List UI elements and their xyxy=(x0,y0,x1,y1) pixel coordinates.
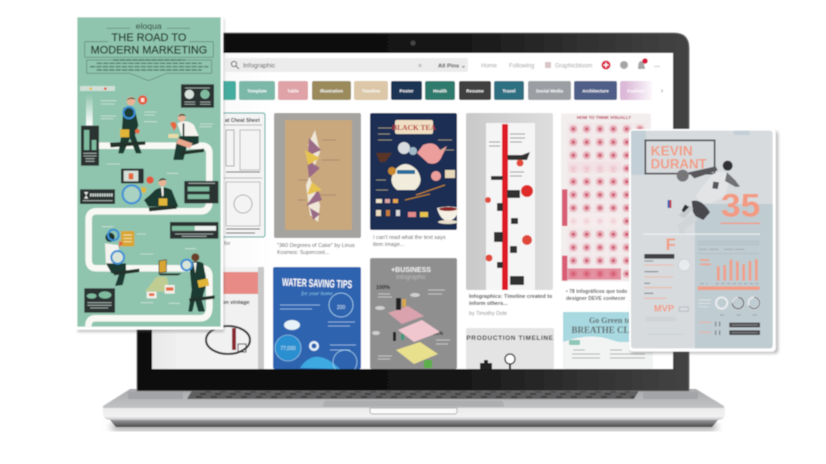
jersey number: 35 xyxy=(721,187,760,224)
pin: go green to breathe clean: BREATHE CLEAN xyxy=(571,325,649,335)
pin: production timeline xyxy=(466,328,554,369)
category chips: Poster xyxy=(399,88,414,94)
top navigation bar xyxy=(225,58,660,72)
person: man with tablet xyxy=(141,176,178,207)
divider xyxy=(643,233,760,236)
pin: 360 degrees of cake xyxy=(274,113,361,238)
scene: laptop with infographics xyxy=(76,16,780,432)
keyboard xyxy=(187,389,640,399)
category chips: Social Media xyxy=(536,88,564,94)
intro text xyxy=(90,60,208,70)
pin caption: icon sheet xyxy=(566,289,627,302)
stat box: clouds xyxy=(84,288,115,313)
step ribbons xyxy=(110,141,215,302)
pin caption: timeline poster: by Timothy Dole xyxy=(469,311,507,317)
search box: Infographic xyxy=(243,62,276,70)
pin: go green to breathe clean: Go Green to xyxy=(589,316,631,325)
salmon bar chart xyxy=(698,259,760,290)
laptop base xyxy=(103,389,725,430)
pin caption: timeline poster: inform others... xyxy=(469,301,508,307)
pin: business infographic: Infographic xyxy=(396,275,426,281)
pin caption: 360 degrees of cake: "360 Degrees of Cake" by Linus xyxy=(277,243,355,249)
laptop xyxy=(103,33,725,430)
navigation links: Graphicbloom xyxy=(555,64,592,70)
person: standing man with satchel xyxy=(188,253,209,312)
name box: DURANT xyxy=(651,156,707,171)
pin: how to think visually icon sheet xyxy=(561,113,651,282)
navigation links: Following xyxy=(509,64,534,70)
tv screen xyxy=(121,169,144,183)
add button xyxy=(602,60,610,70)
pin: go green to breathe clean xyxy=(563,312,660,369)
category chips: Timeline xyxy=(362,88,381,94)
pin caption: cheat sheet: for xyxy=(224,241,231,247)
pin: timeline poster xyxy=(466,113,553,290)
pin caption: black tea: I can't read what the text says xyxy=(373,235,446,241)
mvp award: MVP xyxy=(654,304,674,314)
category chips: Health xyxy=(433,88,447,94)
pin caption: timeline poster: Infographics: Timeline created to xyxy=(469,294,553,300)
category chips: › xyxy=(661,86,664,95)
search box: × xyxy=(418,63,422,70)
magnifier rings xyxy=(108,107,192,270)
panel: the road to modern marketing xyxy=(75,15,224,332)
navigation links xyxy=(481,62,592,70)
search box: All Pins ⌄ xyxy=(438,64,466,70)
pin caption: 360 degrees of cake xyxy=(277,243,355,256)
road xyxy=(88,146,209,327)
pin: black tea xyxy=(370,113,459,230)
pin: water saving tips: 200 xyxy=(337,305,345,311)
pin: water saving tips: 77,000 xyxy=(280,346,296,352)
category chips xyxy=(222,80,664,101)
stat box: progress bars xyxy=(184,181,218,203)
notification bell xyxy=(638,58,648,69)
stat box: wide bar xyxy=(170,222,218,239)
name box xyxy=(645,140,715,174)
stat donuts xyxy=(698,297,760,315)
more menu: ... xyxy=(654,62,660,69)
person: seated woman xyxy=(105,231,134,286)
pin caption: icon sheet: • 78 infográficos que todo xyxy=(566,289,627,295)
laptop icon with cards xyxy=(145,260,182,298)
funnel tube xyxy=(86,93,93,125)
stats header xyxy=(698,242,759,254)
player biography xyxy=(644,254,690,298)
stat box: bars xyxy=(81,126,99,166)
pin: water saving tips xyxy=(273,267,361,374)
pin: business infographic: 60% xyxy=(433,331,444,337)
laptop and panels xyxy=(75,15,778,430)
title frame xyxy=(85,28,213,81)
title: THE ROAD TO xyxy=(111,32,187,44)
pin caption: 360 degrees of cake: Kosmos: Supercool... xyxy=(277,250,330,256)
logo: eloqua xyxy=(136,21,162,31)
category chips: Template xyxy=(247,88,267,94)
pin: business infographic: +BUSINESS xyxy=(391,267,431,274)
category chips: Fashion xyxy=(627,88,645,94)
speech icon xyxy=(138,95,147,105)
navigation links: Home xyxy=(481,64,498,70)
basketball player xyxy=(677,161,740,235)
screen xyxy=(152,53,673,374)
pin caption: black tea xyxy=(373,235,446,248)
category chips: Illustration xyxy=(320,88,343,94)
legend xyxy=(80,86,115,91)
category chips: Travel xyxy=(502,88,516,94)
front notch xyxy=(370,408,457,414)
pin: vintage: on vintage xyxy=(222,300,250,306)
pin: water saving tips: for your home xyxy=(301,290,333,297)
pin caption: timeline poster xyxy=(469,294,553,317)
position letter: F xyxy=(666,235,676,254)
stat box: gauges xyxy=(181,84,214,108)
pin caption: black tea: item image... xyxy=(373,242,405,248)
pin: cheat sheet: at Cheat Sheet xyxy=(225,118,260,124)
pin: production timeline: PRODUCTION TIMELINE xyxy=(466,335,554,342)
trackpad xyxy=(322,400,505,407)
title: MODERN MARKETING xyxy=(91,44,207,56)
person: walking man with briefcase xyxy=(118,97,142,153)
pin: water saving tips: WATER SAVING TIPS xyxy=(282,277,352,291)
category chips: Resume xyxy=(466,88,484,94)
pin: black tea: BLACK TEA xyxy=(392,123,436,132)
name box: KEVIN xyxy=(651,144,693,159)
pin: vintage xyxy=(204,266,264,370)
pin: how to think visually icon sheet: HOW TO THINK VISUALLY xyxy=(577,115,631,120)
webcam xyxy=(410,40,416,46)
category chips: Table xyxy=(287,88,299,94)
draft info rows xyxy=(699,322,760,335)
pin caption: icon sheet: designer DEVE conhecer xyxy=(566,296,626,302)
bar chart axis labels xyxy=(700,283,758,285)
mvp award xyxy=(646,304,688,334)
callout captions xyxy=(101,101,213,303)
panel: kevin durant poster xyxy=(629,129,778,354)
laptop lid xyxy=(137,33,689,391)
category chips: Architecture xyxy=(582,88,609,94)
person: seated man in white shirt xyxy=(168,114,199,160)
search box xyxy=(225,58,468,72)
league logo xyxy=(668,200,671,208)
chat icon xyxy=(620,61,628,69)
pin: business infographic xyxy=(370,258,457,369)
pin: business infographic: 100% xyxy=(376,285,390,291)
pin: cheat sheet xyxy=(222,112,266,238)
title xyxy=(91,32,207,56)
stat box: icon row xyxy=(80,189,115,204)
